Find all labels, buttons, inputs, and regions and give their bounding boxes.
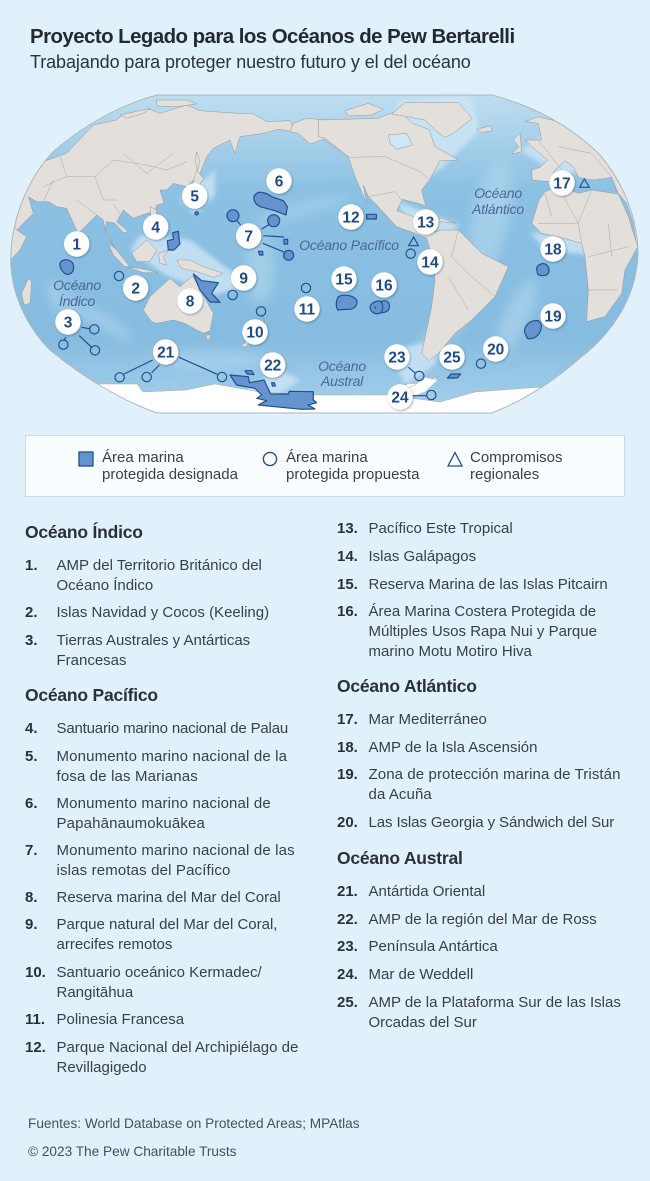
world map [10,94,638,414]
text: 1. [25,557,38,574]
text: 5. [25,748,38,765]
number markers: 13 [417,214,435,232]
copyright: © 2023 The Pew Charitable Trusts [28,1144,236,1159]
title: Proyecto Legado para los Océanos de Pew Bertarelli [30,26,515,48]
text: Santuario oceánico Kermadec/ [56,964,262,981]
text: 24. [337,966,358,983]
ocean name: Océano Pacífico: Océano Pacífico [299,237,399,253]
heading: Océano Atlántico: Océano Atlántico [337,676,477,696]
text: Mar de Weddell [368,966,473,983]
text: 25. [337,994,358,1011]
text: 22. [337,911,358,928]
area 18 [537,264,549,276]
number markers: 8 [186,294,195,310]
text: AMP del Territorio Británico del [56,557,262,574]
number markers: 23 [388,350,406,366]
text: da Acuña [368,786,432,803]
text: Monumento marino nacional de las [56,842,295,859]
area 10 [256,307,266,316]
text: Parque Nacional del Archipiélago de [56,1039,298,1056]
area 20 [476,359,486,368]
item 25 [337,994,621,1031]
text: 7. [25,842,38,859]
text: Revillagigedo [56,1059,147,1076]
text: marino Motu Motiro Hiva [368,643,532,660]
area 6 [254,192,287,215]
area 25 [447,374,461,378]
text: 20. [337,814,358,831]
text: Polinesia Francesa [56,1011,184,1028]
number markers: 9 [239,270,248,288]
number markers: 6 [275,174,284,190]
text: Área Marina Costera Protegida de [368,603,596,620]
item 11 [25,1011,184,1028]
text: Antártida Oriental [368,883,485,900]
subtitle: Trabajando para proteger nuestro futuro y el del océano [30,52,471,72]
item 22 [337,911,597,928]
map outline [11,95,638,413]
text: Orcadas del Sur [368,1014,477,1031]
item 9 [25,916,277,953]
text: Santuario marino nacional de Palau [56,720,288,737]
number markers: 1 [72,236,81,254]
legend item: proposed: Área marina [286,449,368,466]
ocean name: Océano Atlántico: Atlántico [471,201,524,217]
legend item: regional commitments: Compromisos [470,449,563,466]
area 3 [59,325,100,355]
number markers: 17 [553,176,571,192]
text: 15. [337,576,358,593]
text: Reserva Marina de las Islas Pitcairn [368,576,608,593]
item 12 [25,1039,298,1076]
ocean name: Océano Atlántico: Océano [474,185,522,201]
text: 4. [25,720,38,737]
text: 9. [25,916,38,933]
item 18 [337,739,537,756]
text: Pacífico Este Tropical [368,520,513,537]
number markers: 21 [157,344,175,362]
legend item: regional commitments: regionales [470,466,539,483]
text: AMP de la región del Mar de Ross [368,911,597,928]
number markers: 16 [375,278,393,294]
protected areas, eastern map [336,179,589,400]
ocean base [0,90,650,420]
text: Rangitāhua [56,984,133,1001]
item 16 [337,603,597,660]
area 19 [525,321,541,339]
text: Mar Mediterráneo [368,711,487,728]
text: 17. [337,711,358,728]
area 5 [195,212,198,215]
area 23 [408,367,424,381]
land: Asia, Australia and western Pacific [0,100,327,347]
ocean name: Océano Índico: Índico [59,293,95,309]
item 8 [25,889,281,906]
item 3 [25,632,250,669]
Antarctica [98,376,542,412]
area 4 [167,231,180,250]
area 13 [409,237,418,246]
text: Francesas [56,652,127,669]
number markers: 19 [544,308,562,326]
legend [25,435,625,497]
area 14 [406,249,415,258]
item 17 [337,711,487,728]
number markers: 24 [391,390,409,406]
area 16 [370,301,389,314]
number markers: 3 [64,314,73,332]
text: 3. [25,632,38,649]
legend item: designated: Área marina [102,449,184,466]
number markers: 7 [244,228,253,246]
text: AMP de la Isla Ascensión [368,739,537,756]
item 2 [25,604,269,621]
item 24 [337,966,473,983]
heading: Océano Pacífico: Océano Pacífico [25,685,158,705]
text: 13. [337,520,358,537]
ocean name: Océano Austral: Austral [320,373,364,389]
number markers: 12 [342,210,360,226]
text: 6. [25,795,38,812]
protected areas, western map [59,192,317,409]
item 19 [337,766,621,803]
legend item: proposed: protegida propuesta [286,466,419,483]
area 21 [115,357,227,382]
area 15 [336,295,357,310]
legend item: proposed [262,449,420,483]
text: 10. [25,964,46,981]
text: Islas Navidad y Cocos (Keeling) [56,604,269,621]
area 17 [580,179,589,187]
item 5 [25,748,287,785]
text: Monumento marino nacional de [56,795,271,812]
text: Múltiples Usos Rapa Nui y Parque [368,623,597,640]
number markers: 15 [335,272,353,288]
number markers: 22 [264,358,281,374]
item 21 [337,883,485,900]
text: 2. [25,604,38,621]
area 12 [367,214,376,219]
text: Parque natural del Mar del Coral, [56,916,277,933]
item 13 [337,520,513,537]
item 6 [25,795,271,832]
text: fosa de las Marianas [56,768,198,785]
text: Monumento marino nacional de la [56,748,287,765]
text: 12. [25,1039,46,1056]
text: 16. [337,603,358,620]
text: 21. [337,883,358,900]
text: 18. [337,739,358,756]
number markers: 2 [131,280,140,298]
area 11 [301,283,311,293]
item 1 [25,557,262,594]
land: Americas, Europe and Africa [318,103,650,398]
sources: Fuentes: World Database on Protected Areas; MPAtlas [28,1116,360,1131]
text: Océano Índico [56,577,153,594]
number markers: 4 [151,220,160,236]
area 1 [60,260,74,274]
text: Papahānaumokuākea [56,815,205,832]
legend item: designated: protegida designada [102,466,238,483]
ocean name: Océano Austral: Océano [318,358,366,374]
legend item: designated [78,449,238,483]
area 7 [227,210,294,260]
item 15 [337,576,608,593]
area 2 [114,271,124,281]
item 10 [25,964,262,1001]
number markers: 25 [443,350,461,366]
area 24 [412,390,436,400]
number markers: 20 [487,342,504,358]
text: 11. [25,1011,45,1028]
area 22 [230,371,317,409]
number markers: 11 [299,302,316,318]
item 4 [25,720,288,737]
area 9 [228,290,237,300]
heading: Océano Austral: Océano Austral [337,848,463,868]
ocean name: Océano Índico: Océano [53,277,101,293]
text: Reserva marina del Mar del Coral [56,889,281,906]
text: Zona de protección marina de Tristán [368,766,621,783]
number markers: 10 [246,324,264,342]
item 20 [337,814,614,831]
number markers: 5 [190,188,199,206]
text: Tierras Australes y Antárticas [56,632,250,649]
text: 19. [337,766,358,783]
number markers [55,168,575,410]
text: 14. [337,548,358,565]
heading: Océano Índico: Océano Índico [25,522,143,542]
text: islas remotas del Pacífico [56,862,230,879]
text: Las Islas Georgia y Sándwich del Sur [368,814,614,831]
number markers: 18 [544,242,562,258]
item 7 [25,842,295,879]
text: AMP de la Plataforma Sur de las Islas [368,994,621,1011]
item 14 [337,548,476,565]
text: 23. [337,938,358,955]
text: Península Antártica [368,938,498,955]
item 23 [337,938,498,955]
area 8 [193,274,220,302]
number markers: 14 [421,254,439,272]
legend item: regional commitments [447,449,563,483]
text: Islas Galápagos [368,548,476,565]
text: 8. [25,889,38,906]
text: arrecifes remotos [56,936,172,953]
